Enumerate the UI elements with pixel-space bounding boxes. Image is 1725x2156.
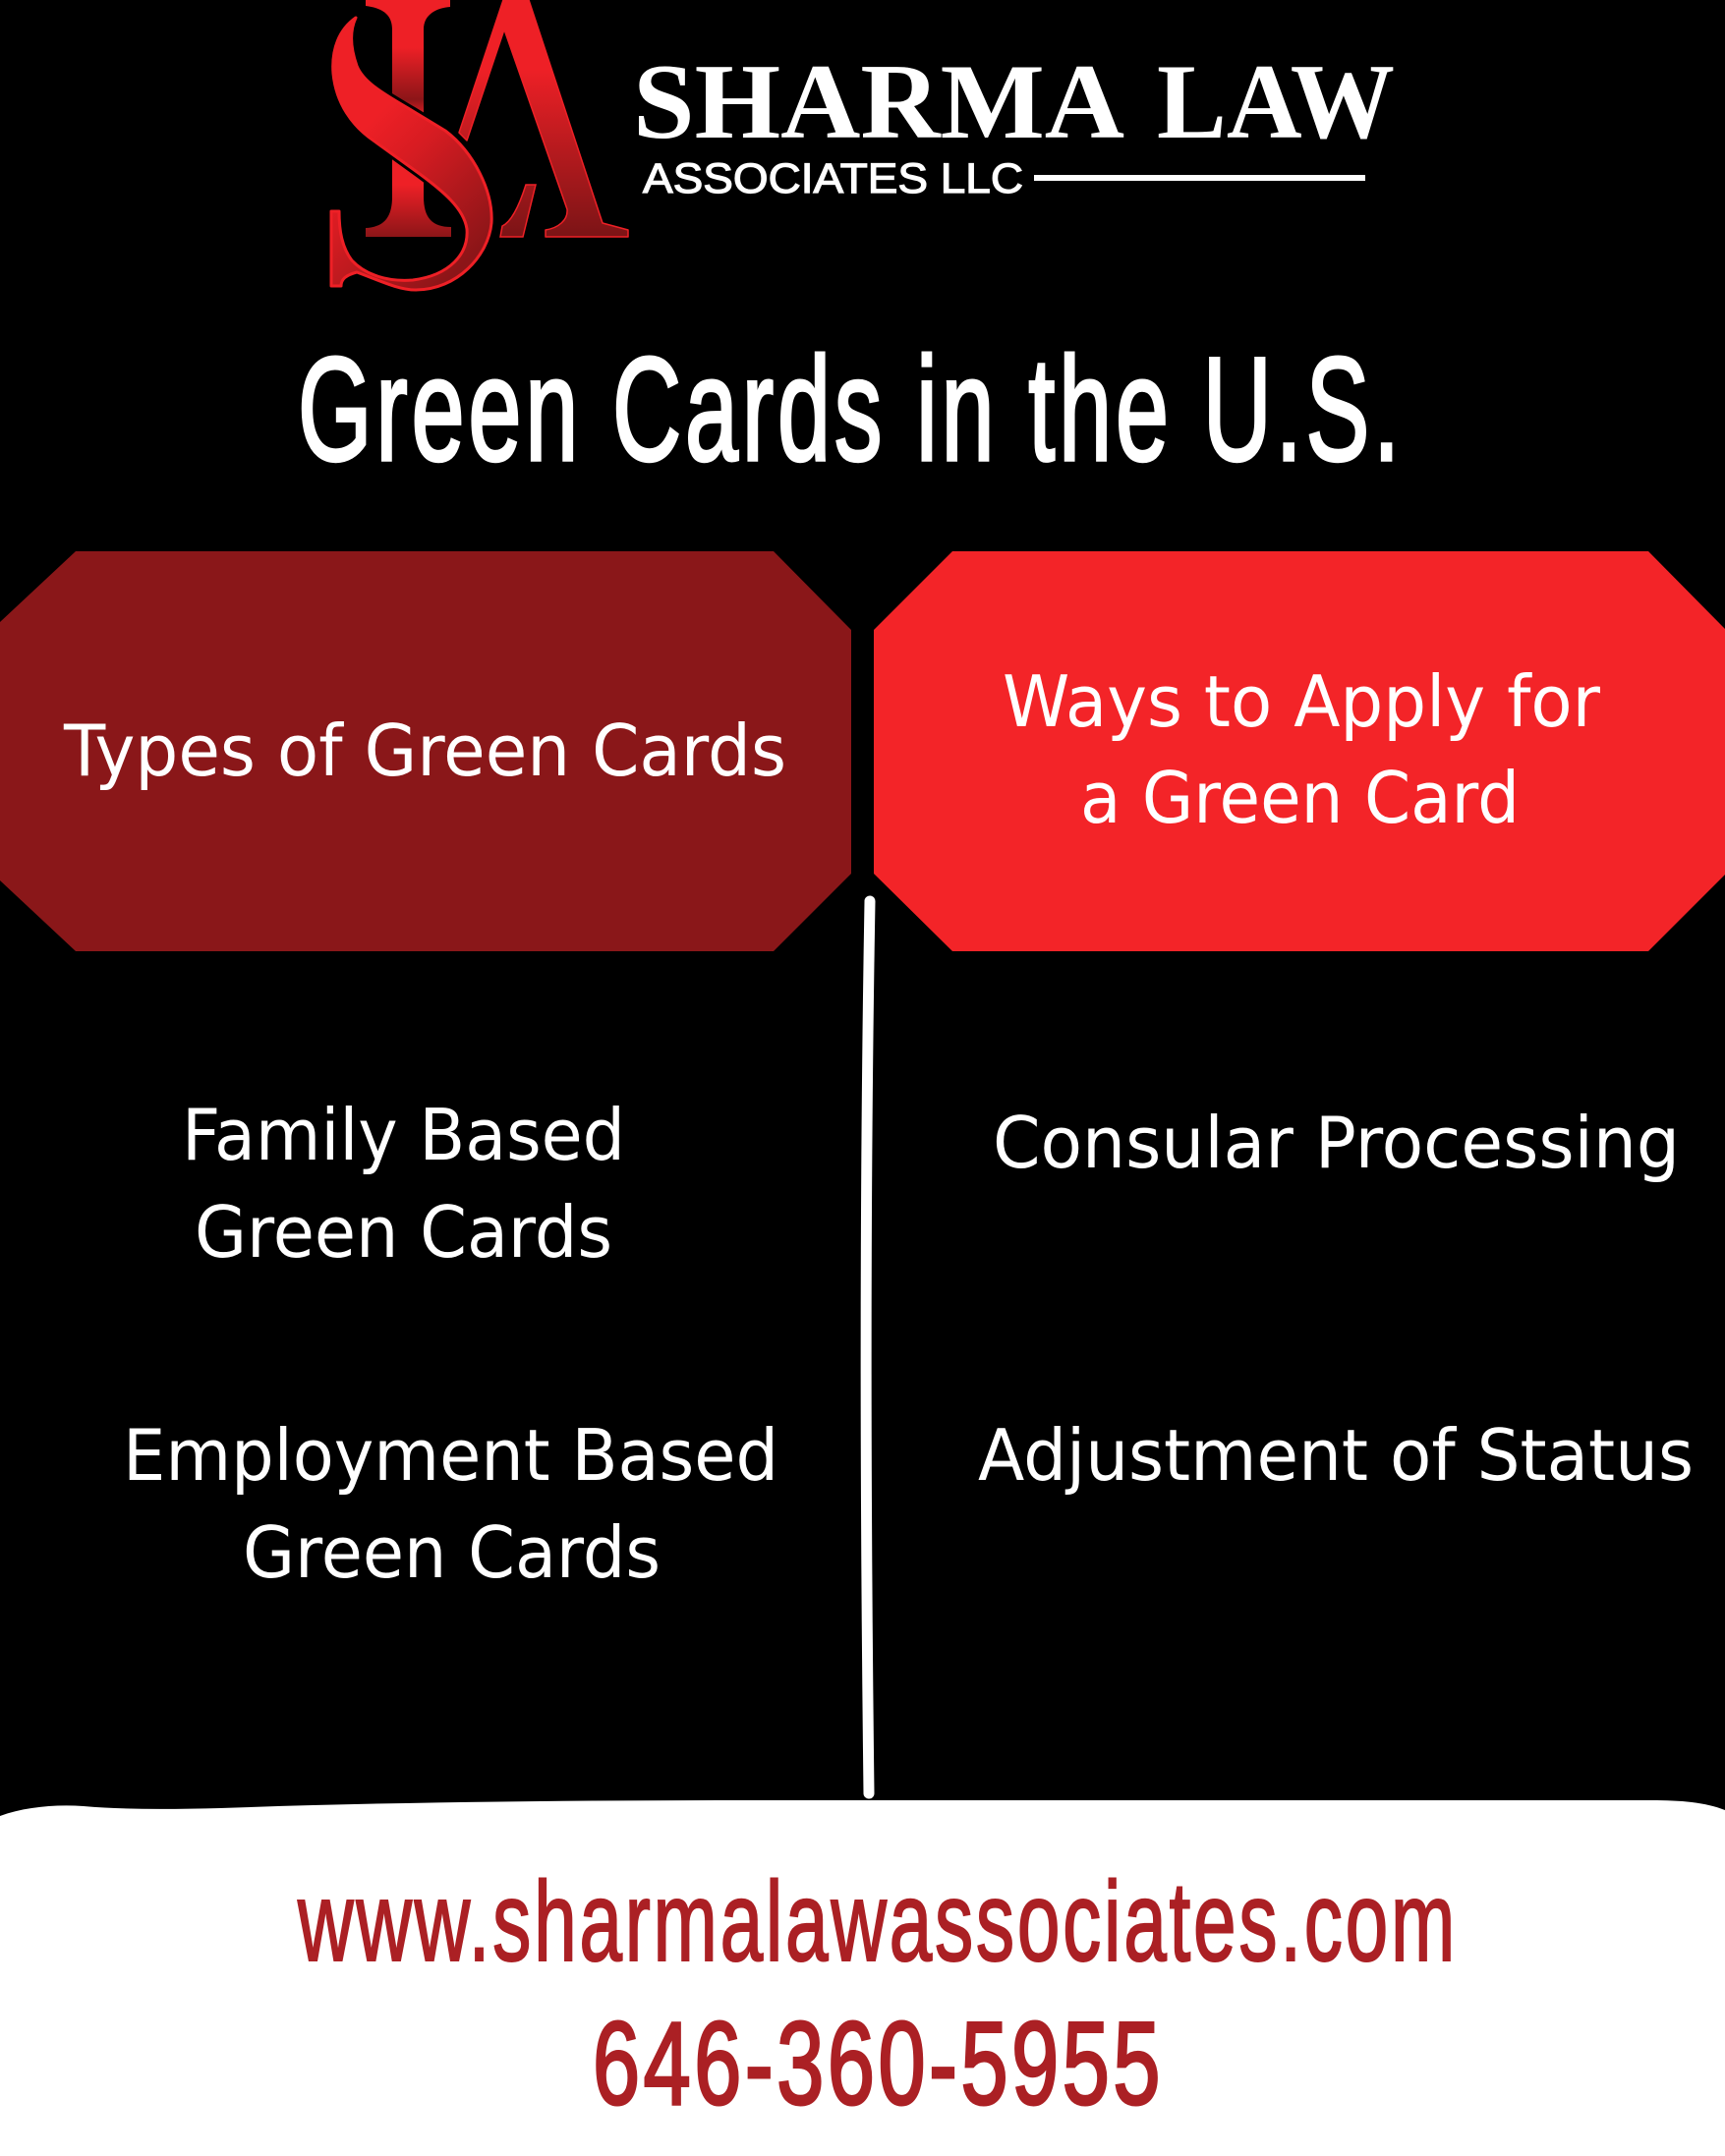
text: employment based green cards [123, 1414, 778, 1594]
text: employment based green cards: Employment Based [123, 1414, 778, 1497]
text: family based green cards: Green Cards [195, 1191, 612, 1274]
panel: ways to apply header: Ways to Apply for [1003, 660, 1600, 743]
text: adjustment of status: Adjustment of Status [978, 1414, 1694, 1497]
footer panel [0, 1800, 1725, 2156]
phone: 646-360-5955 [593, 1998, 1164, 2129]
vertical divider [866, 901, 870, 1793]
text: consular processing: Consular Processing [993, 1102, 1680, 1184]
text: family based green cards: Family Based [182, 1094, 625, 1176]
text: family based green cards [182, 1094, 625, 1274]
firm subtitle: ASSOCIATES LLC [643, 155, 1023, 202]
panel: types of green cards header: Types of Green Cards [63, 709, 786, 792]
logo [331, 0, 1395, 290]
panel: ways to apply header [874, 551, 1725, 951]
text: employment based green cards: Green Cards [243, 1511, 661, 1594]
firm name [633, 42, 1395, 161]
subtitle rule [1034, 175, 1365, 181]
panel: types of green cards header [0, 551, 851, 951]
panel: ways to apply header: a Green Card [1080, 757, 1520, 839]
firm name: LAW [1157, 42, 1395, 161]
firm name: SHARMA [633, 42, 1124, 161]
logo monogram [331, 0, 628, 290]
